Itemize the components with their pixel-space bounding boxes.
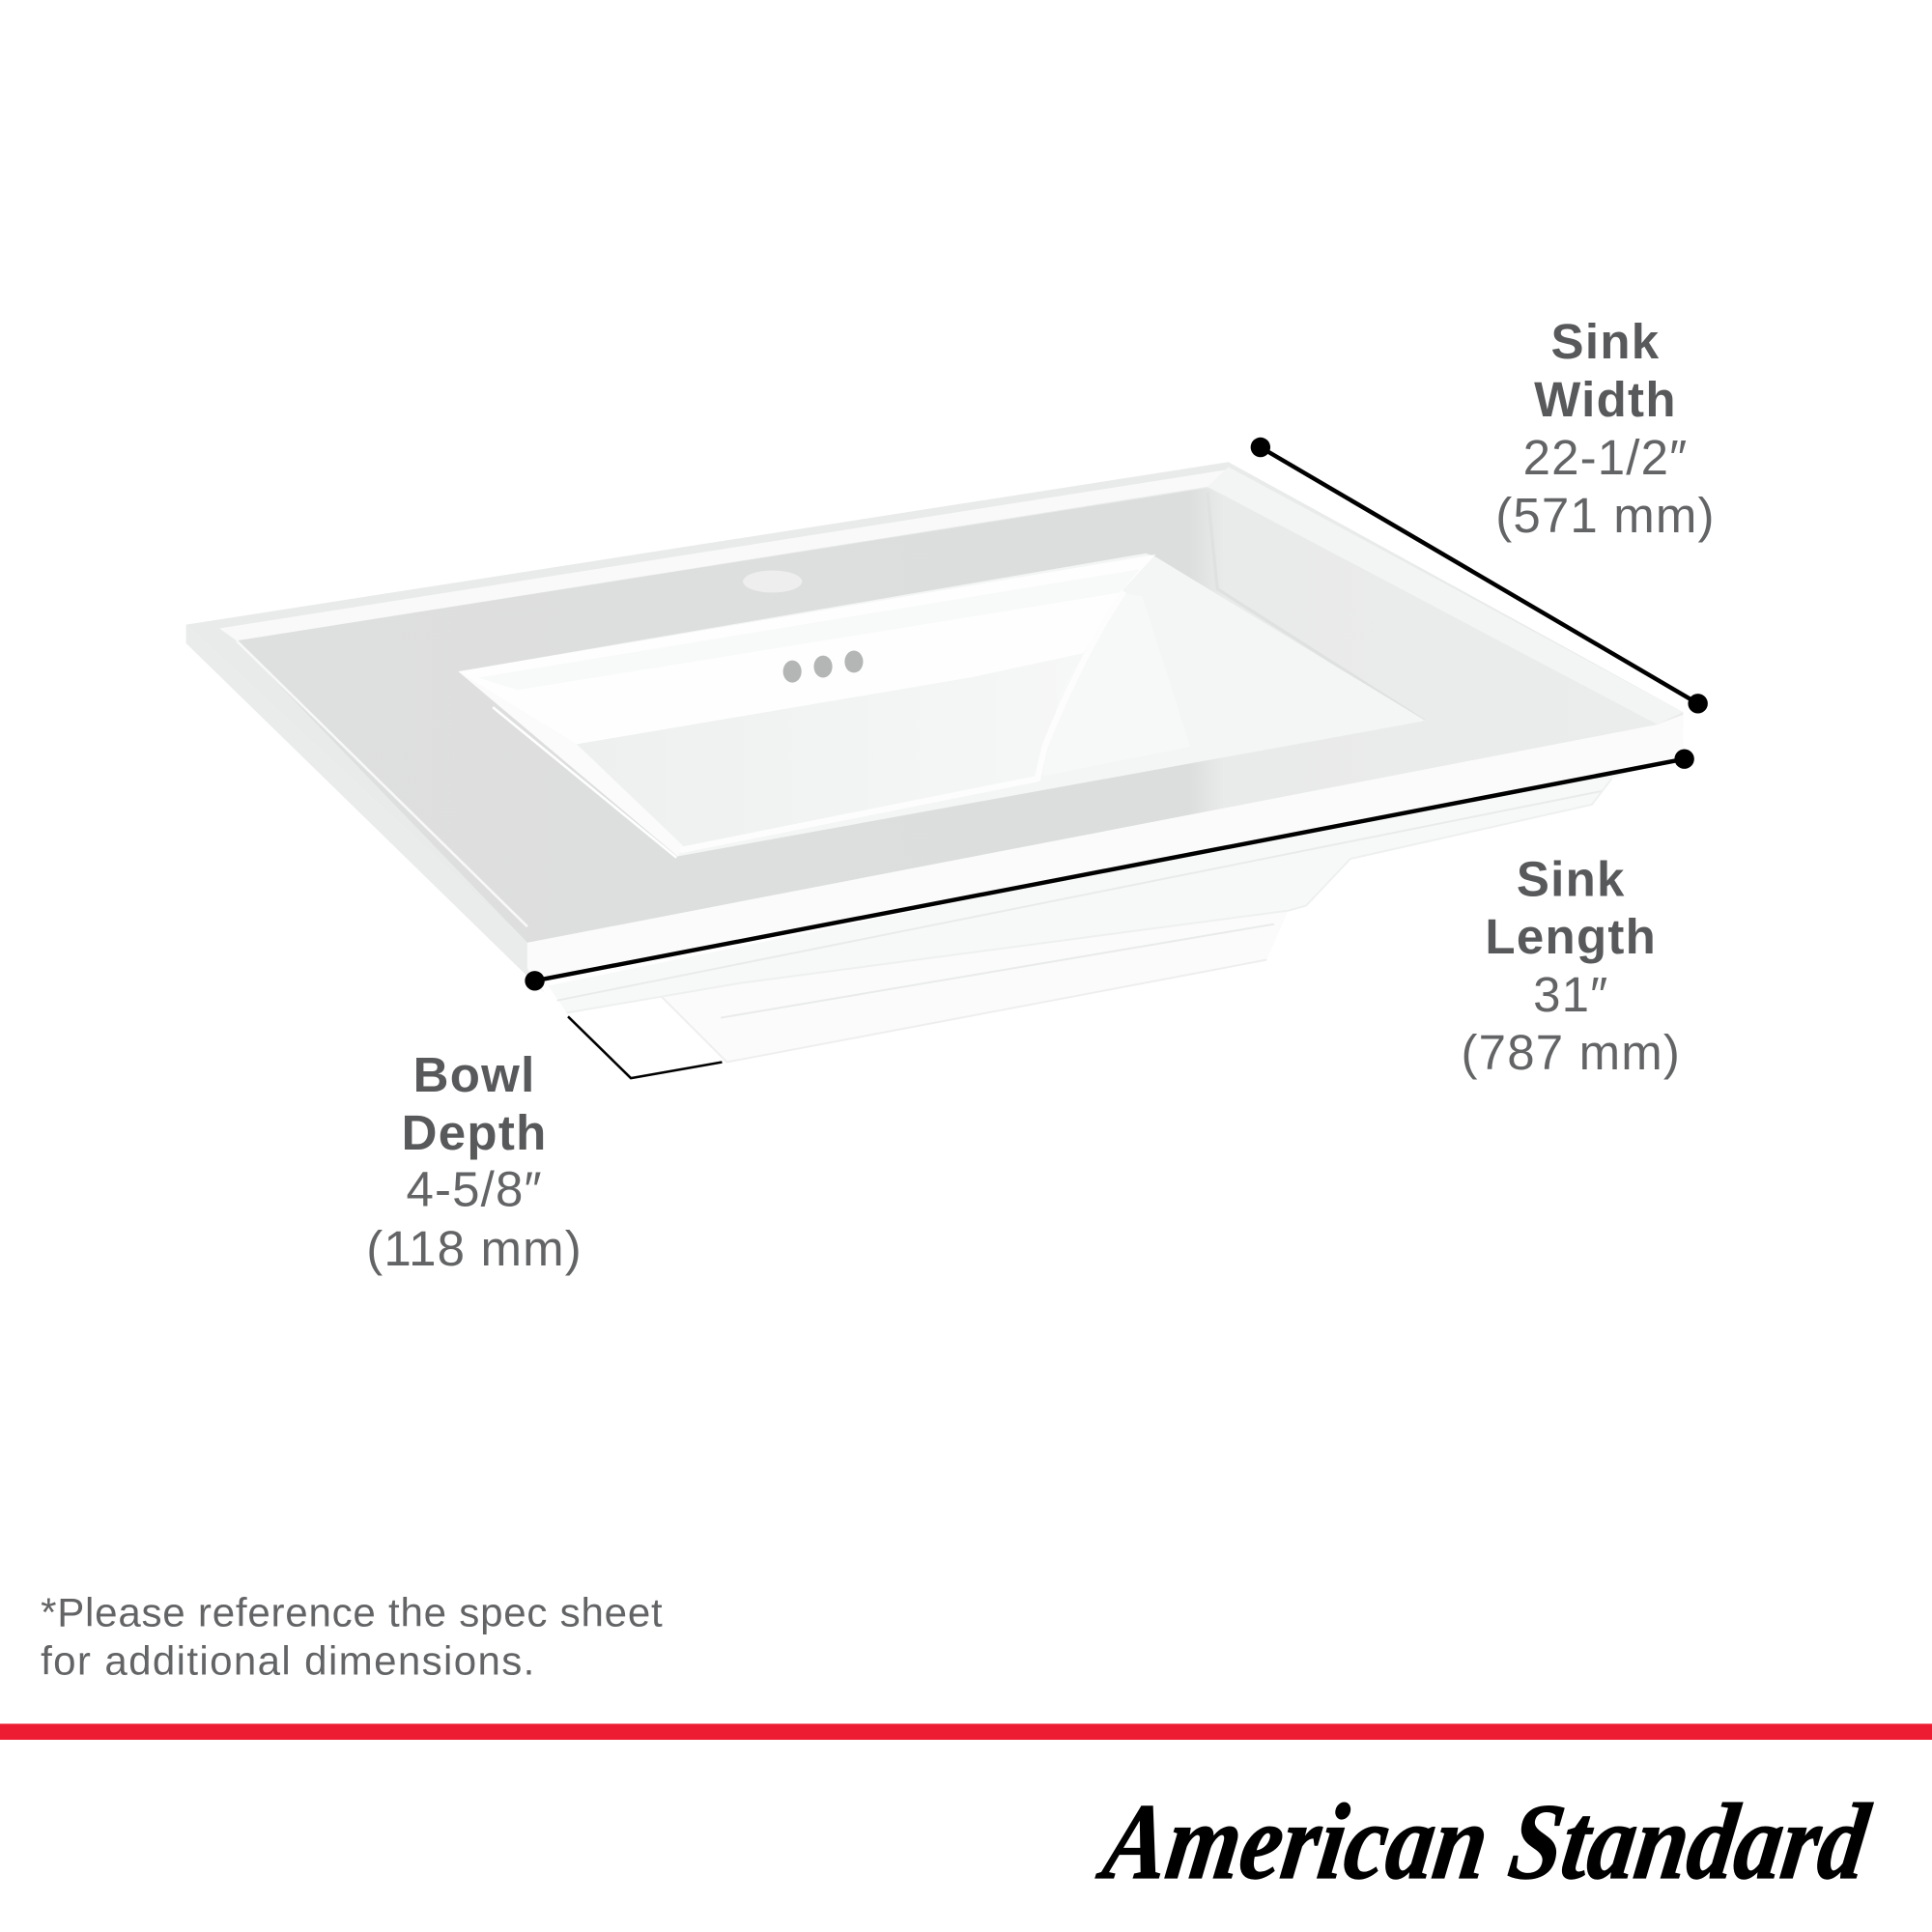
red divider bar [0,1723,1932,1740]
right deck recess line [1208,493,1424,721]
label: bowl depth [366,1047,582,1276]
label: bowl depth: Depth [402,1105,548,1160]
label: sink length [1462,851,1681,1080]
label: sink width [1495,314,1716,543]
front band [527,715,1685,982]
dimension line: sink width [1251,438,1708,714]
back band [219,469,1229,640]
dimension line: sink length [525,750,1694,991]
bowl right wall [1042,593,1190,777]
bowl left edge highlight [493,707,676,858]
deck surface [237,488,1658,943]
label: sink length: (787 mm) [1462,1025,1681,1080]
bowl left wall [458,671,684,856]
footnote: for additional dimensions. [41,1637,536,1683]
overflow holes [783,650,863,683]
label: sink width: Width [1534,372,1677,427]
bowl floor [577,653,1084,846]
label: bowl depth: Bowl [413,1047,536,1102]
label: sink length: 31″ [1533,967,1608,1022]
bowl opening [458,554,1426,856]
label: bowl depth: (118 mm) [366,1221,582,1276]
label: bowl depth: 4-5/8″ [406,1162,543,1217]
dimension bracket: bowl depth [568,1016,722,1078]
left deck highlight [237,640,527,926]
sink illustration [186,462,1685,1062]
bowl curved highlight [680,591,1123,850]
left outer edge [186,625,545,993]
faucet hole [743,571,802,593]
footnote: *Please reference the spec sheet [41,1590,663,1635]
bowl rim band [478,569,1140,690]
label: sink width: 22-1/2″ [1523,430,1688,485]
label: sink width: Sink [1551,314,1660,369]
label: sink length: Length [1485,909,1657,964]
label: sink length: Sink [1517,851,1626,906]
underside stepped moulding [549,754,1683,1012]
bowl back wall [458,554,1155,744]
countertop rim [186,462,1683,971]
right band [1208,467,1683,724]
label: sink width: (571 mm) [1495,488,1716,543]
bowl underside base [657,909,1289,1062]
footnote [41,1590,663,1683]
